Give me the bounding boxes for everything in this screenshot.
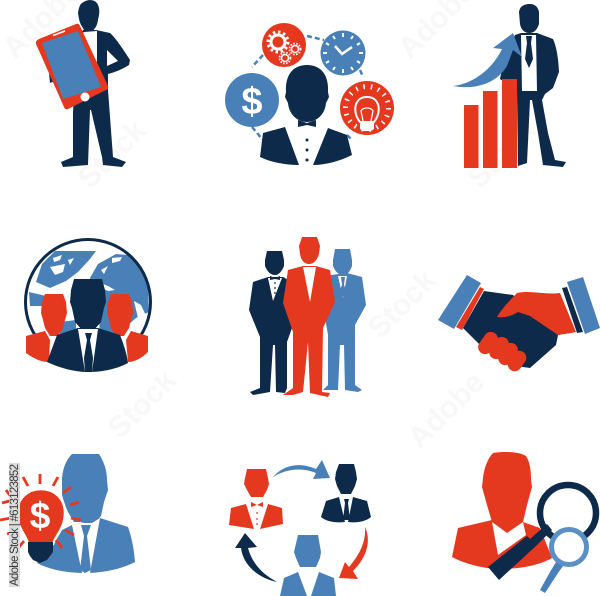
dollar circle: $: [241, 81, 263, 123]
dashed connectors: [252, 36, 363, 140]
blue man: [280, 535, 336, 596]
icon: executive with idea circles: [225, 23, 394, 165]
globe: [28, 242, 149, 362]
bulb: $: [30, 495, 51, 536]
icon: person under magnifying glass: [452, 452, 596, 593]
man: [37, 454, 135, 573]
navy magnifier: [488, 485, 596, 580]
clock circle: [320, 30, 366, 76]
blue arrow: [273, 460, 330, 479]
red man: [283, 237, 335, 397]
faint watermark: Stock: [102, 364, 183, 445]
tuxedo: [260, 127, 352, 165]
dollar circle: [225, 73, 279, 127]
navy man: [321, 464, 371, 522]
bulb circle: [340, 81, 394, 135]
watermark label: Adobe Stock: Adobe Stock | #613123852: [9, 464, 21, 586]
faint watermark: Stock: [362, 264, 443, 345]
man: [500, 4, 566, 167]
navy arrow: [235, 533, 277, 582]
globe ring: [26, 240, 150, 364]
right cuff: [562, 277, 600, 334]
blue man: [322, 249, 366, 392]
bars: [464, 79, 517, 168]
icon: team in front of globe: [20, 240, 156, 378]
icon: man with dollar idea bulb: [0, 454, 135, 573]
navy leader: [47, 279, 128, 372]
icon: man holding phone: [36, 0, 130, 167]
navy hand: [463, 291, 576, 368]
growth arrow: [453, 33, 522, 87]
icon: man with growth chart: [453, 4, 566, 168]
faint watermark: Stock: [462, 114, 543, 195]
gear circle: [262, 23, 306, 67]
red man: [229, 469, 283, 529]
icon: handshake: [438, 275, 600, 374]
red colleagues: [26, 294, 148, 362]
white mask bottom: [20, 338, 156, 378]
fingers: [475, 329, 529, 374]
red arrow: [339, 527, 368, 579]
red hand: [497, 292, 576, 335]
blue magnifier: [540, 530, 586, 593]
faint watermark: Stock: [72, 114, 153, 195]
faint watermark: [0, 0, 543, 455]
faint watermark: Adobe: [402, 366, 491, 455]
navy man: [249, 251, 292, 395]
red person: [452, 452, 552, 569]
head: [285, 65, 329, 122]
icon: three-person team: [249, 237, 366, 397]
phone: [36, 24, 108, 109]
left cuff: [438, 275, 484, 330]
icon: people cycle: [229, 460, 371, 596]
bulb rays: [0, 474, 81, 548]
